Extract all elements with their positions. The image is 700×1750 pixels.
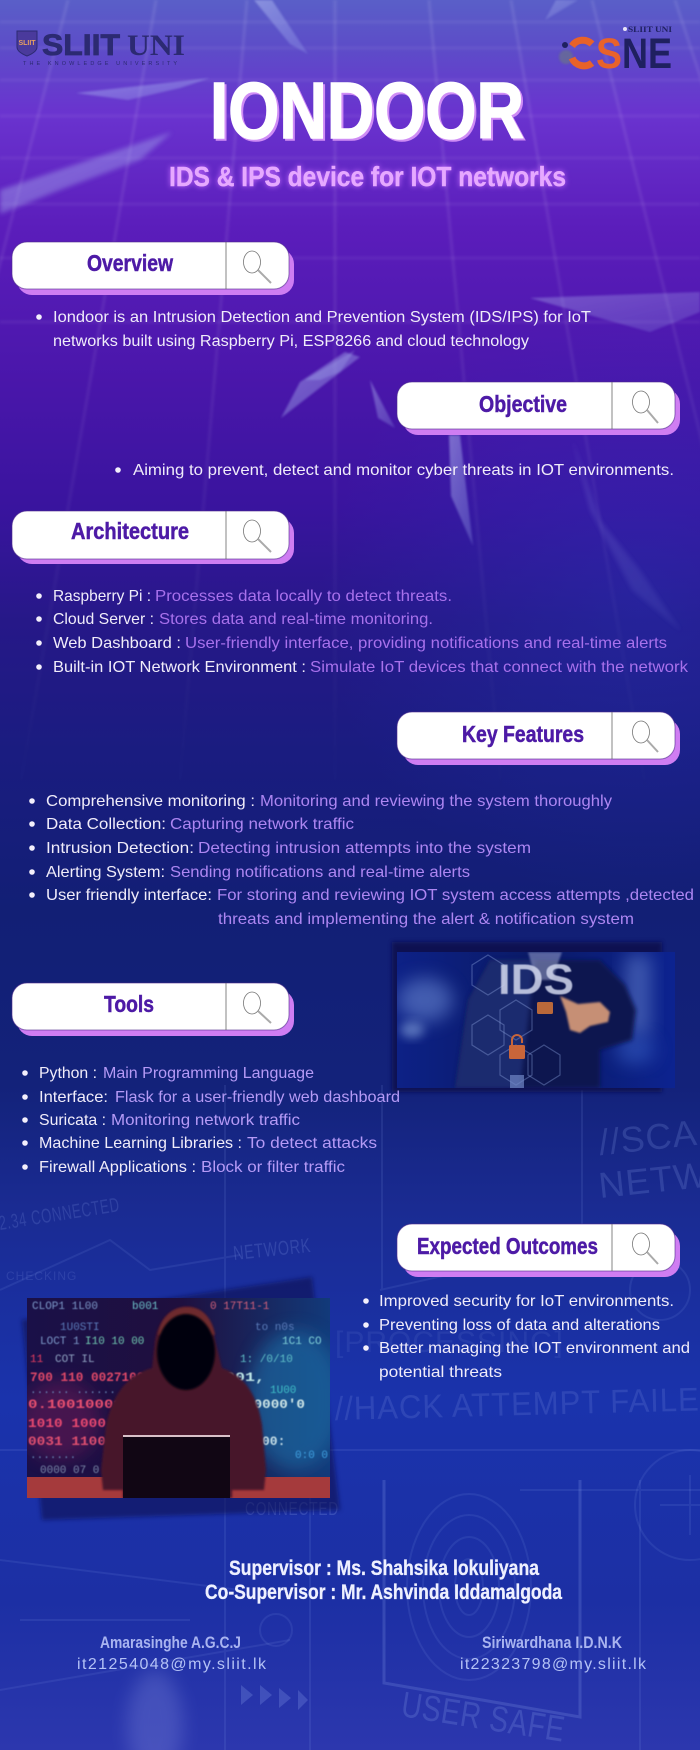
logo: SLIIT UNI: SLIIT (18, 40, 36, 47)
heading: Overview (12, 242, 294, 295)
supervisors: Supervisor : Ms. Shahsika lokuliyana (229, 1557, 539, 1580)
photo: hooded hacker: 0000 07 0 (40, 1465, 99, 1477)
supervisors: Co-Supervisor : Mr. Ashvinda Iddamalgoda (205, 1581, 562, 1604)
architecture list: Raspberry Pi : (53, 588, 151, 605)
logo: CSNE: SLIIT UNI (628, 25, 672, 34)
perspective grid (0, 0, 700, 1000)
student: Siriwardhana (460, 1633, 647, 1673)
tools list: Python : (39, 1065, 97, 1082)
key features list: Monitoring and reviewing the system thoroughly (260, 793, 612, 810)
photo: hooded hacker: b001 (132, 1301, 159, 1313)
key features list: Detecting intrusion attempts into the system (198, 840, 531, 857)
heading: Overview: Overview (87, 250, 173, 276)
expected outcomes list: potential threats (379, 1364, 502, 1381)
tools list: To detect attacks (247, 1135, 377, 1152)
key features list: Data Collection: (46, 816, 166, 833)
overview text: Iondoor is an Intrusion Detection and Prevention System (IDS/IPS) for IoT (53, 309, 591, 326)
tools list: Main Programming Language (103, 1065, 314, 1082)
photo: hooded hacker: ...... ...... ....... (30, 1385, 169, 1397)
cyber HUD backdrop: [PROCESSING] (335, 1326, 564, 1359)
photo: hooded hacker: 1C1 CO (282, 1336, 322, 1348)
key features list (29, 793, 694, 928)
photo: hooded hacker: 700 110 00271000 (30, 1370, 152, 1385)
photo: hooded hacker: 10000'0 (245, 1397, 305, 1412)
heading: Architecture (12, 511, 294, 564)
architecture list: Stores data and real-time monitoring. (159, 611, 433, 628)
photo: hooded hacker: 11 (30, 1354, 44, 1366)
photo: hooded hacker: LOCT 1 (40, 1336, 80, 1348)
heading: Architecture: Architecture (71, 518, 189, 544)
tools list (22, 1065, 400, 1176)
student: Siriwardhana: it22323798@my.sliit.lk (460, 1656, 647, 1673)
photo: hooded hacker: ....... (30, 1450, 76, 1462)
architecture list: User-friendly interface, providing notifications and real-time alerts (185, 635, 667, 652)
photo: hooded hacker: 1U00 (270, 1385, 296, 1397)
tools list: Machine Learning Libraries : (39, 1135, 242, 1152)
heading: Tools (12, 983, 294, 1036)
supervisors (205, 1557, 562, 1604)
architecture list (36, 588, 689, 676)
student: Amarasinghe (77, 1633, 267, 1673)
photo: hooded hacker: 0:0 0 (295, 1450, 328, 1462)
architecture list: Cloud Server : (53, 611, 154, 628)
key features list: Alerting System: (46, 864, 165, 881)
title: IONDOOR (210, 66, 524, 155)
key features list: Sending notifications and real-time alerts (170, 864, 470, 881)
key features list: Capturing network traffic (170, 816, 354, 833)
logo: CSNE (559, 25, 672, 78)
heading: Expected Outcomes (397, 1224, 680, 1277)
cyber HUD backdrop: NETWORK (232, 1235, 312, 1265)
expected outcomes list (363, 1293, 690, 1381)
tools list: Interface: (39, 1089, 108, 1106)
subtitle: IDS & IPS device for IOT networks (169, 161, 566, 192)
logo: SLIIT UNI: SLIIT (42, 29, 120, 62)
heading: Key Features (397, 712, 680, 765)
key features list: For storing and reviewing IOT system access attempts ,detected (217, 887, 694, 904)
tools list: Flask for a user-friendly web dashboard (115, 1089, 400, 1106)
architecture list: Processes data locally to detect threats. (155, 588, 452, 605)
key features list: Comprehensive monitoring : (46, 793, 255, 810)
photo: hooded hacker: to n0s (255, 1322, 295, 1334)
photo: hooded hacker: 0.10010001 (28, 1397, 123, 1412)
logo: CSNE: NE (622, 30, 672, 78)
cyber HUD backdrop (0, 1085, 700, 1750)
heading: Tools: Tools (104, 991, 154, 1017)
photo: hooded hacker (20, 1277, 343, 1520)
student: Amarasinghe: Amarasinghe A.G.C.J (100, 1633, 241, 1652)
heading: Expected Outcomes: Expected Outcomes (417, 1233, 598, 1259)
objective text: Aiming to prevent, detect and monitor cyber threats in IOT environments. (133, 462, 674, 479)
cyber HUD backdrop: //SCA (597, 1112, 699, 1163)
photo: IDS business man: IDS (498, 956, 574, 1004)
cyber HUD backdrop: CONNECTED (245, 1499, 339, 1519)
cyber HUD backdrop: 2.34 CONNECTED (0, 1194, 121, 1235)
architecture list: Web Dashboard : (53, 635, 181, 652)
photo: hooded hacker: I10 10 00 (85, 1336, 144, 1348)
heading: Objective: Objective (479, 391, 567, 417)
key features list: Intrusion Detection: (46, 840, 194, 857)
photo: hooded hacker: 1010 1000 (28, 1416, 106, 1431)
photo: IDS business man (392, 942, 675, 1092)
key features list: User friendly interface: (46, 887, 212, 904)
overview text: networks built using Raspberry Pi, ESP8266 and cloud technology (53, 333, 529, 350)
architecture list: Built-in IOT Network Environment : (53, 659, 306, 676)
expected outcomes list: Improved security for IoT environments. (379, 1293, 674, 1310)
logo: CSNE: S (596, 30, 622, 78)
key features list: threats and implementing the alert & notification system (218, 911, 634, 928)
photo: hooded hacker: 0031 1100 (28, 1434, 106, 1449)
photo: hooded hacker: 0 17T11-1 (210, 1301, 270, 1313)
photo: hooded hacker: 1: /0/10 (240, 1354, 293, 1366)
tools list: Block or filter traffic (201, 1159, 345, 1176)
tools list: Suricata : (39, 1112, 106, 1129)
logo: SLIIT UNI: UNI (127, 29, 185, 62)
expected outcomes list: Better managing the IOT environment and (379, 1340, 690, 1357)
light shards (0, 0, 700, 632)
heading: Objective (397, 382, 680, 435)
student: Siriwardhana: Siriwardhana I.D.N.K (482, 1633, 623, 1652)
overview text (36, 309, 591, 350)
heading: Key Features: Key Features (462, 721, 584, 747)
cyber HUD backdrop: CHECKING (6, 1269, 77, 1283)
photo: hooded hacker: 00: (262, 1434, 285, 1449)
tools list: Monitoring network traffic (111, 1112, 300, 1129)
architecture list: Simulate IoT devices that connect with the network (310, 659, 689, 676)
tools list: Firewall Applications : (39, 1159, 196, 1176)
photo: hooded hacker: COT IL (55, 1354, 95, 1366)
student: Amarasinghe: it21254048@my.sliit.lk (77, 1656, 267, 1673)
expected outcomes list: Preventing loss of data and alterations (379, 1317, 660, 1334)
logo: SLIIT UNI (17, 29, 185, 67)
photo: hooded hacker: 1U0STI (60, 1322, 100, 1334)
photo: hooded hacker: CLOP1 1L00 (32, 1301, 98, 1313)
photo: hooded hacker: 0001, (215, 1370, 265, 1385)
logo: SLIIT UNI: THE KNOWLEDGE UNIVERSITY (23, 61, 177, 67)
